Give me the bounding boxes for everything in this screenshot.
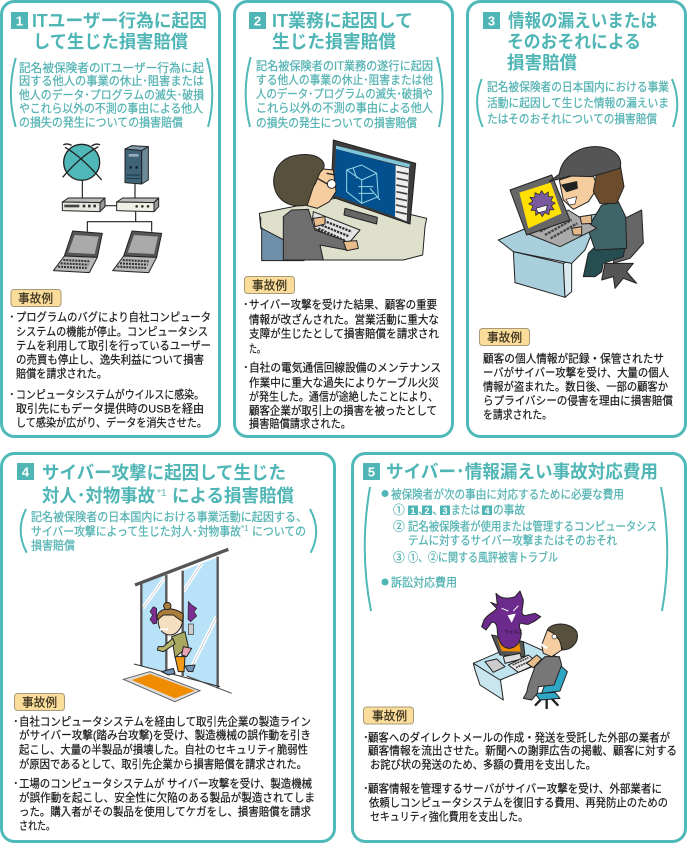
description 1: 他人のデータ･プログラムの滅失･破損 [19, 88, 204, 102]
accident example text 5: お詫び状の発送のため、多額の費用を支出した。 [370, 758, 596, 772]
panel 2: IT business [234, 2, 452, 436]
accident example label 1: 事故例 [18, 290, 53, 306]
description 1: の損失の発生についての損害賠償 [19, 116, 183, 130]
description 2: これら以外の不測の事由による他人 [256, 101, 433, 115]
accident example label 5 [364, 707, 414, 724]
accident example text 1: 賠償を請求された。 [16, 366, 107, 380]
accident example text 2 [243, 298, 441, 430]
description 3 [477, 79, 677, 127]
coverage description 5: ② [393, 520, 405, 534]
accident example label 3 [480, 328, 530, 346]
coverage description 5: ①、②に関する風評被害トラブル [408, 550, 558, 564]
heading 4: 対人･対物事故 [42, 486, 155, 506]
illustration: person working at a computer [259, 140, 427, 261]
coverage description 5: テムに対するサイバー攻撃またはそのおそれ [408, 534, 617, 548]
description 3: たはそのおそれについての損害賠償 [487, 112, 657, 126]
panel 4: bodily injury and property damage [2, 454, 334, 842]
heading 3: そのおそれによる [507, 32, 641, 52]
accident example text 4: が原因であるとして、取引先企業から損害賠償を請求された。 [19, 757, 307, 771]
heading 4: サイバー攻撃に起因して生じた [42, 462, 286, 483]
coverage description 5: 、 [432, 503, 444, 517]
heading 3: 3 [488, 14, 495, 28]
accident example label 2: 事故例 [252, 278, 287, 292]
accident example text 1: テムを利用して取引を行っているユーザー [16, 338, 211, 352]
heading 2: 2 [254, 14, 261, 28]
accident example text 3 [483, 352, 673, 422]
coverage description 5: ③ [393, 550, 405, 564]
heading 2: 生じた損害賠償 [272, 32, 396, 52]
description 4 [21, 509, 316, 553]
coverage description 5: 被保険者が次の事由に対応するために必要な費用 [391, 488, 624, 502]
description 4: についての [252, 524, 306, 538]
accident example text 2: サイバー攻撃を受けた結果、顧客の重要 [249, 298, 437, 312]
accident example text 3: らプライバシーの侵害を理由に損害賠償 [483, 394, 673, 408]
accident example text 3: 情報が盗まれた。数日後、一部の顧客か [483, 380, 668, 394]
illustration: orange floor mat [123, 672, 232, 702]
panel 1: IT user conduct [2, 2, 220, 436]
description 3: 活動に起因して生じた情報の漏えいま [487, 96, 669, 110]
illustration: virus devil emerging from computer [473, 591, 577, 709]
accident example text 1: ･ [9, 312, 15, 324]
heading 1: して生じた損害賠償 [33, 32, 188, 52]
accident example text 1: の売買も停止し、逸失利益について損害 [16, 352, 204, 366]
description 1: やこれら以外の不測の事由による他人 [19, 102, 203, 116]
coverage description 5: 記名被保険者が使用または管理するコンピュータシス [408, 520, 657, 534]
accident example text 2: 情報が改ざんされた。営業活動に重大な [249, 312, 439, 326]
accident example text 3: ーバがサイバー攻撃を受け、大量の個人 [483, 366, 669, 380]
accident example text 1: ･ [9, 390, 15, 402]
heading 4: 4 [22, 464, 30, 480]
description 2: 記名被保険者のIT業務の遂行に起因 [256, 59, 433, 73]
accident example text 2: が発生した。通信が途絶したことにより、 [249, 390, 438, 404]
accident example text 1: して感染が広がり、データを消失させた。 [16, 416, 207, 430]
heading 3 [483, 11, 657, 73]
accident example text 4: った。購入者がその製品を使用してケガをし、損害賠償を請求 [19, 804, 311, 818]
accident example text 2: 顧客企業が取引上の損害を被ったとして [249, 404, 437, 418]
accident example text 2: た。 [249, 342, 265, 356]
accident example text 2: ･ [243, 362, 249, 374]
coverage description 5: 訴訟対応費用 [391, 576, 457, 590]
accident example text 2: 損害賠償請求された。 [249, 416, 351, 430]
heading 3: 損害賠償 [507, 53, 577, 73]
description 2: の損失の発生についての損害賠償 [256, 116, 417, 130]
description 3: 記名被保険者の日本国内における事業 [487, 80, 669, 94]
accident example text 2: 支障が生じたとして損害賠償を請求され [249, 326, 439, 340]
accident example text 5: ･ [363, 732, 369, 744]
accident example text 4: 工場のコンピュータシステムが サイバー攻撃を受け、製造機械 [19, 776, 312, 790]
coverage description 5: 4 [484, 506, 490, 516]
accident example text 5: 顧客情報を管理するサーバがサイバー攻撃を受け、外部業者に [368, 782, 662, 796]
accident example label 4: 事故例 [22, 694, 57, 710]
accident example text 2: ･ [243, 300, 249, 312]
coverage description 5: 3 [442, 506, 448, 516]
heading 2 [249, 11, 413, 52]
coverage description 5: 、 [418, 503, 430, 517]
heading 5: サイバー･情報漏えい事故対応費用 [386, 462, 658, 482]
heading 1 [11, 11, 207, 52]
description 1: 記名被保険者のITユーザー行為に起 [19, 61, 204, 75]
accident example label 1 [11, 290, 61, 306]
description 4: 記名被保険者の日本国内における事業活動に起因する、 [31, 510, 307, 524]
illustration: network with globe, server, routers and laptops [53, 144, 162, 273]
heading 2: IT業務に起因して [272, 11, 413, 31]
illustration: person caught in automatic door [134, 549, 228, 688]
accident example text 2: 作業中に重大な過失によりケーブル火災 [249, 376, 439, 390]
heading 1: ITユーザー行為に起因 [32, 11, 207, 31]
accident example text 4: ･ [13, 716, 19, 728]
description 4: *1 [241, 524, 249, 533]
description 2: する他人の事業の休止･阻害または他 [256, 73, 433, 87]
description 4: 損害賠償 [31, 538, 75, 552]
accident example text 5: 顧客へのダイレクトメールの作成・発送を受託した外部の業者が [368, 730, 670, 744]
accident example text 1: 取引先にもデータ提供時のUSBを経由 [16, 402, 204, 416]
accident example text 4: ･ [13, 778, 19, 790]
accident example text 5: セキュリティ強化費用を支出した。 [370, 810, 528, 824]
description 1: 因する他人の事業の休止･阻害または [19, 74, 204, 88]
accident example text 4: 自社コンピュータシステムを経由して取引先企業の製造ライン [19, 714, 311, 728]
heading 5: 5 [368, 464, 375, 480]
heading 4: による損害賠償 [172, 486, 294, 506]
heading 4 [17, 462, 294, 506]
heading 3: 情報の漏えいまたは [508, 11, 657, 31]
coverage description 5: の事故 [493, 503, 525, 517]
accident example text 5: 顧客情報を流出させた。新聞への謝罪広告の掲載、顧客に対する [368, 744, 677, 758]
accident example text 1: システムの機能が停止。コンピュータシス [16, 324, 208, 338]
accident example text 4: 起こし、大量の半製品が損壊した。自社のセキュリティ脆弱性 [19, 742, 308, 756]
description 1 [11, 58, 212, 130]
accident example label 3: 事故例 [487, 330, 522, 344]
accident example label 2 [244, 276, 294, 294]
accident example text 4 [13, 714, 315, 832]
coverage description 5: 1 [410, 506, 416, 516]
accident example text 4: が誤作動を起こし、安全性に欠陥のある製品が製造されてしま [19, 790, 315, 804]
accident example text 2: 自社の電気通信回線設備のメンテナンス [249, 360, 441, 374]
coverage description 5 [365, 487, 667, 611]
accident example text 3: 顧客の個人情報が記録・保管されたサ [483, 352, 664, 366]
accident example text 5: 依頼しコンピュータシステムを復旧する費用、再発防止のための [369, 796, 668, 810]
heading 4: *1 [157, 488, 167, 499]
illustration: virus devil emerging from computer: ウイルス [504, 629, 523, 635]
accident example text 4: がサイバー攻撃(踏み台攻撃)を受け、製造機械の誤作動を引き [19, 728, 311, 742]
description 2 [246, 57, 443, 130]
panel 3: information leak [468, 2, 686, 436]
accident example text 5 [363, 730, 677, 824]
description 4: サイバー攻撃によって生じた対人･対物事故 [31, 524, 241, 538]
coverage description 5: 2 [424, 506, 430, 516]
accident example text 4: された。 [19, 820, 55, 832]
description 2: 人のデータ･プログラムの滅失･破損や [256, 87, 433, 101]
accident example label 5: 事故例 [372, 708, 407, 723]
accident example label 4 [14, 694, 64, 710]
accident example text 1: プログラムのバグにより自社コンピュータ [16, 310, 211, 324]
panel 5: incident response costs [352, 454, 686, 842]
accident example text 1 [9, 310, 211, 430]
accident example text 3: を請求された。 [483, 408, 552, 422]
coverage description 5: ① [393, 503, 405, 517]
illustration: hacker with virus on laptop [498, 147, 643, 297]
heading 1: 1 [16, 14, 23, 28]
accident example text 5: ･ [363, 784, 369, 796]
coverage description 5: または [451, 503, 480, 517]
accident example text 1: コンピュータシステムがウイルスに感染。 [16, 388, 204, 402]
